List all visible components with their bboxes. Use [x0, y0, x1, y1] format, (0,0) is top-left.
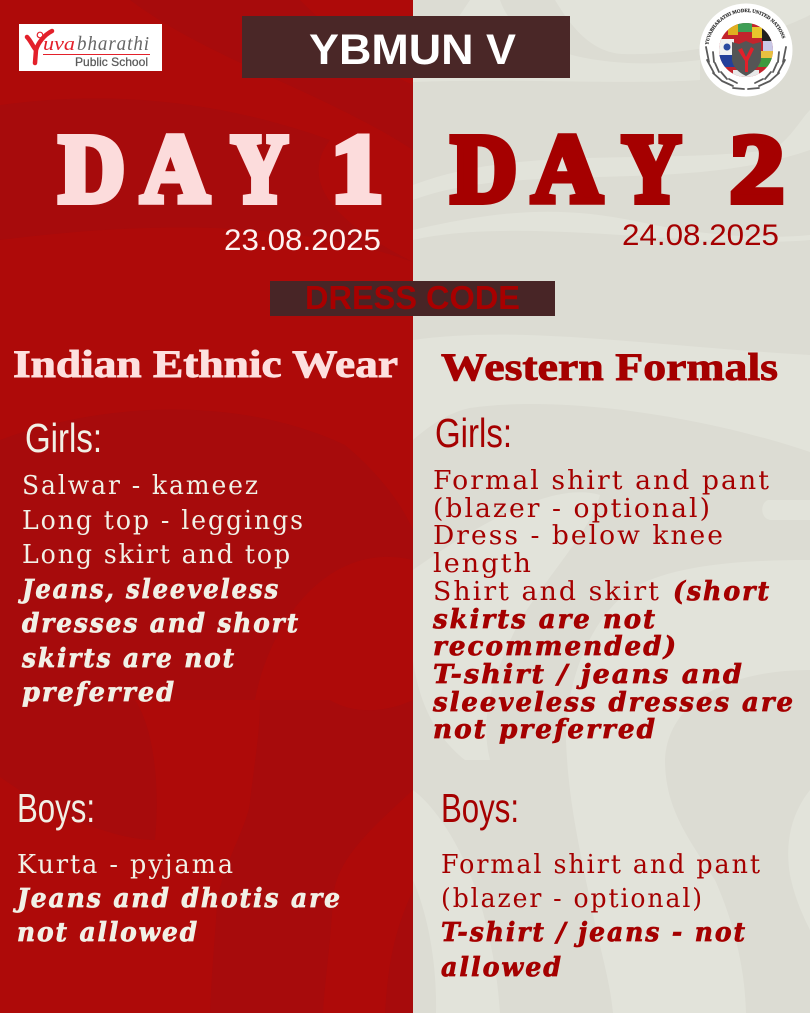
label: Girls: Girls:: [25, 415, 102, 461]
panel: day 2 beige background: [413, 0, 810, 1013]
list: boys day 2: Formal shirt and pant: [441, 850, 762, 880]
title banner: YBMUN V: YBMUN V: [309, 26, 516, 74]
label: Girls: Girls:: [435, 410, 512, 456]
text block: day 2 girls: [432, 410, 795, 745]
list: boys day 2: [441, 850, 762, 983]
list: boys day 2: T-shirt / jeans - not: [441, 918, 747, 948]
date: day 2: 24.08.2025: [622, 219, 779, 252]
list: girls day 2: [432, 466, 795, 745]
logo: Yuvabharathi Public School: [19, 24, 162, 71]
list: girls day 1: Long top - leggings: [22, 506, 305, 536]
icon: model united nations emblem: [700, 4, 792, 96]
panel: day 1 red background: [0, 0, 413, 1013]
heading: Western Formals: Western Formals: [441, 346, 778, 389]
list: girls day 1: [17, 471, 305, 708]
logo wordmark: uva: [43, 34, 75, 55]
heading: DAY 1: 1: [331, 116, 383, 222]
list: girls day 1: skirts are not: [21, 644, 236, 674]
list: girls day 1: Long skirt and top: [22, 540, 292, 570]
list: boys day 1: Jeans and dhotis are: [12, 884, 342, 914]
text block: day 2 boys: [441, 785, 762, 983]
heading: DAY 1: [59, 116, 383, 222]
heading: DAY 1: D: [59, 116, 125, 222]
list: boys day 1: [12, 850, 342, 948]
list: girls day 2: Formal shirt and pant: [433, 466, 771, 496]
list: girls day 2: sleeveless dresses are: [432, 688, 795, 718]
list: girls day 1: Jeans, sleeveless: [17, 575, 280, 605]
list: boys day 1: Kurta - pyjama: [17, 850, 235, 880]
list: girls day 2: (blazer - optional): [433, 494, 712, 524]
heading: DAY 2: A: [532, 116, 602, 222]
list: girls day 2: not preferred: [433, 715, 657, 745]
list: girls day 2: Shirt and skirt: [433, 577, 661, 607]
laurel wreath: [706, 47, 786, 89]
logo wordmark: bharathi: [77, 33, 150, 55]
list: girls day 1: dresses and short: [22, 609, 300, 639]
logo wordmark: Public School: [75, 55, 148, 69]
list: girls day 2: skirts are not: [432, 605, 657, 635]
text block: day 1 boys: [12, 785, 342, 948]
label: Boys: Boys:: [441, 785, 519, 831]
heading: DAY 2: Y: [622, 116, 681, 222]
title banner: YBMUN V: [242, 16, 570, 78]
logo wordmark: [43, 33, 150, 69]
text block: day 1 girls: [17, 415, 305, 708]
list: girls day 2: Dress - below knee: [433, 521, 725, 551]
list: boys day 1: not allowed: [17, 918, 199, 948]
heading: DAY 1: A: [141, 116, 209, 222]
list: girls day 2: recommended): [433, 632, 678, 662]
list: girls day 2: length: [433, 549, 533, 579]
heading: DAY 2: 2: [730, 116, 784, 222]
date: day 1: 23.08.2025: [224, 224, 381, 257]
icon: red figure Y: [27, 31, 52, 63]
heading: DAY 2: [451, 116, 784, 222]
list: boys day 2: allowed: [441, 953, 563, 983]
list: girls day 1: Salwar - kameez: [22, 471, 260, 501]
list: girls day 1: preferred: [22, 678, 176, 708]
heading: DAY 2: D: [451, 116, 517, 222]
list: girls day 2: (short: [673, 577, 771, 607]
heading: Indian Ethnic Wear: Indian Ethnic Wear: [13, 343, 398, 386]
label: Boys: Boys:: [17, 785, 95, 831]
heading: DAY 1: Y: [231, 116, 288, 222]
icon: model united nations emblem: YUVABHARATHI MODEL UNITED NATIONS: [705, 8, 786, 44]
banner: dress code: DRESS CODE: [305, 279, 520, 316]
list: boys day 2: (blazer - optional): [441, 884, 704, 914]
list: girls day 2: T-shirt / jeans and: [433, 660, 744, 690]
